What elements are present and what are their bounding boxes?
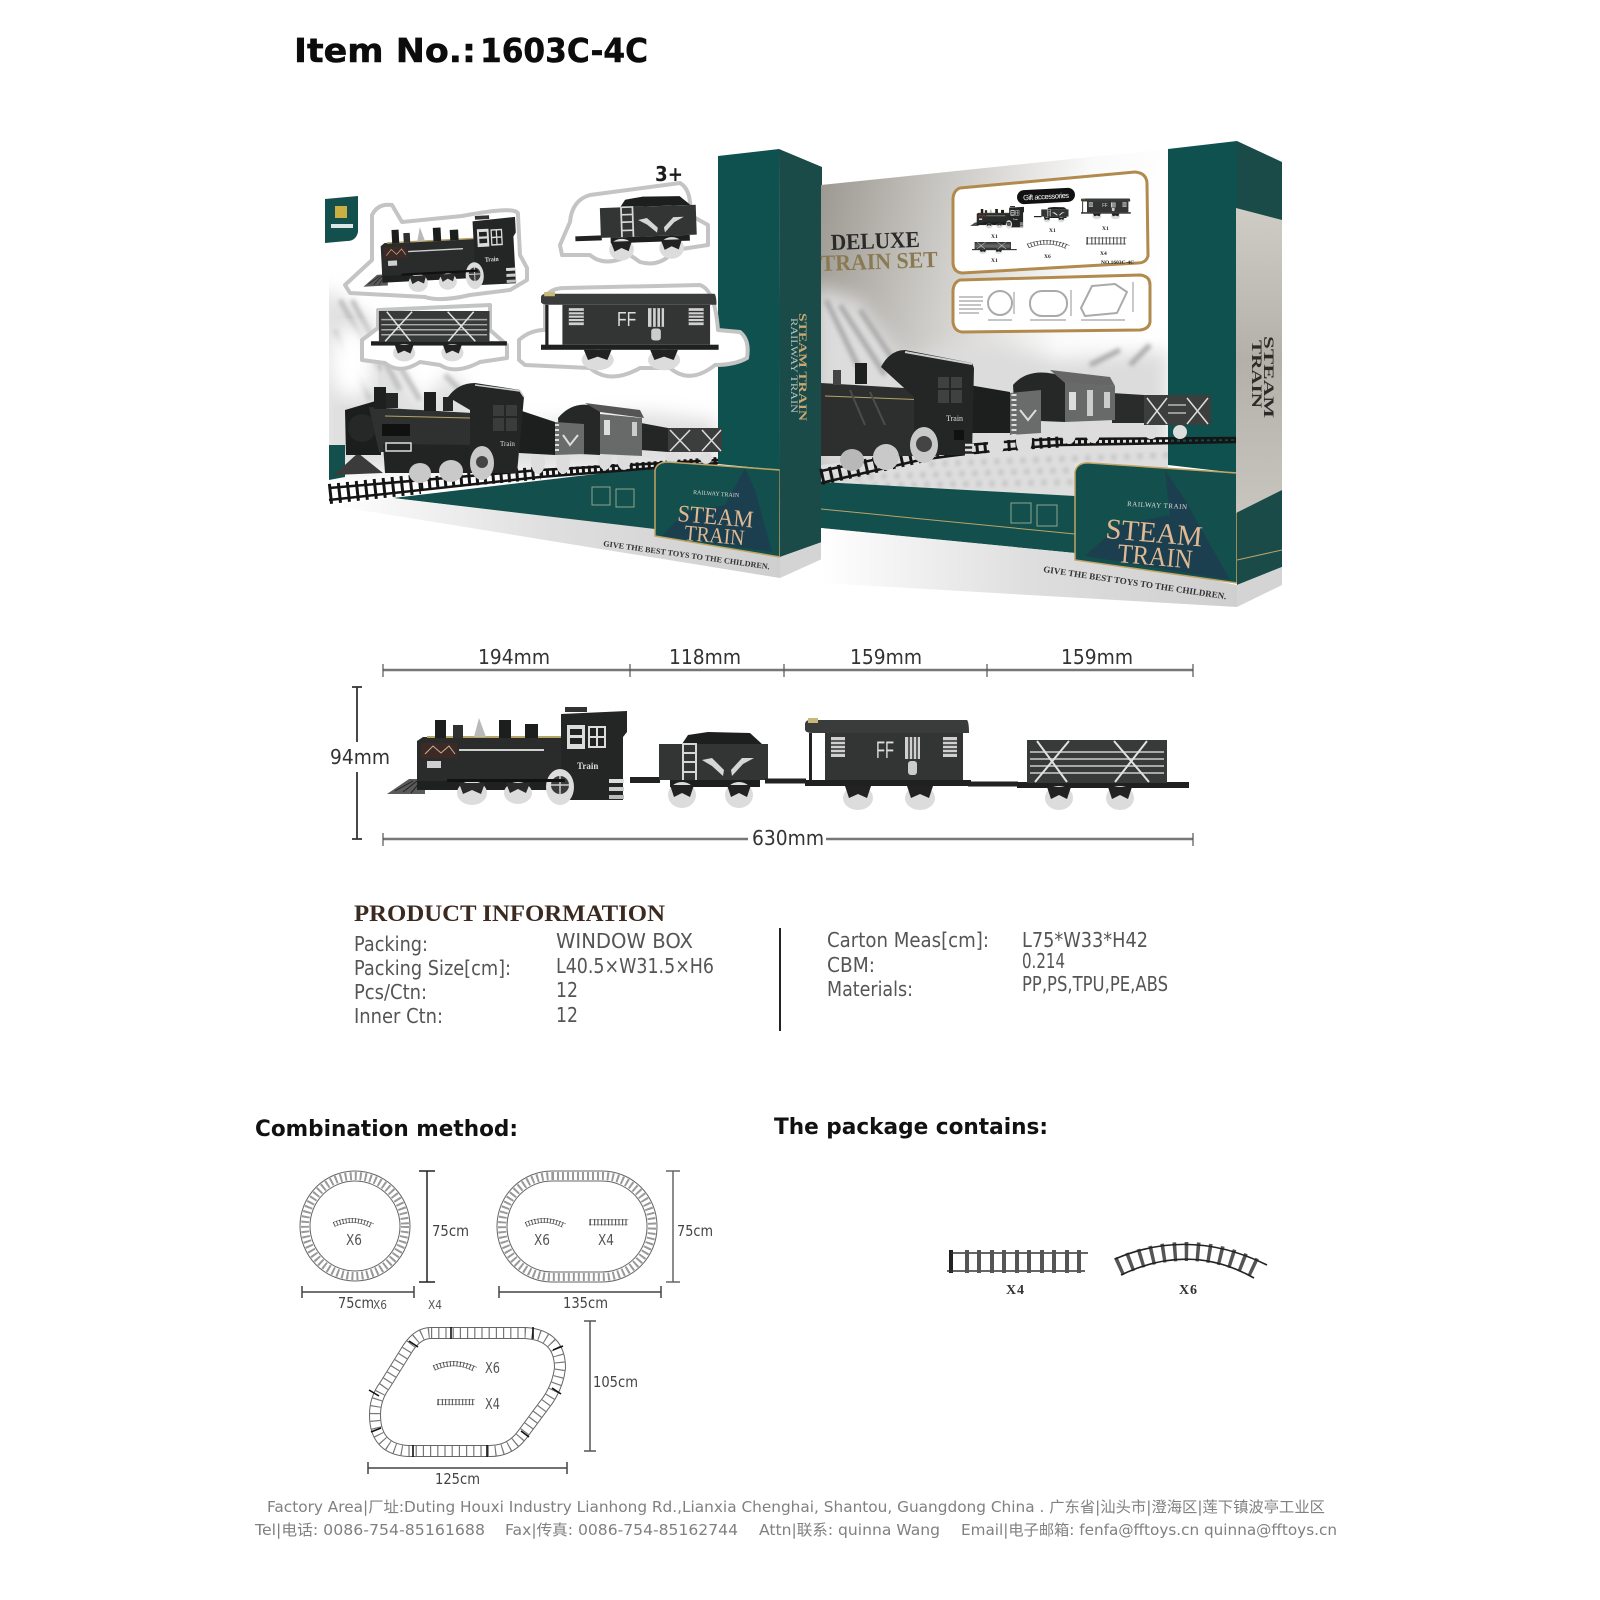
product information left column bbox=[354, 929, 714, 1028]
grey lower band bbox=[821, 528, 1237, 607]
product information right column: L75*W33*H42 bbox=[1022, 928, 1148, 952]
oval track layout: X4 bbox=[598, 1231, 614, 1249]
width labels: 630mm bbox=[752, 826, 824, 850]
locomotive: Train bbox=[500, 440, 515, 448]
hexagonal track layout: 105cm bbox=[593, 1373, 638, 1391]
round track layout: 75cm bbox=[338, 1294, 374, 1312]
pack quantities: X6 bbox=[1044, 254, 1051, 260]
width labels: 159mm bbox=[1061, 645, 1133, 669]
snowy ground bbox=[821, 440, 1168, 497]
round track layout: 75cm bbox=[432, 1222, 469, 1240]
sticker: tender bbox=[560, 183, 708, 264]
tender bbox=[969, 385, 1041, 457]
icons on band bbox=[1011, 503, 1057, 526]
spine title: STEAM TRAIN bbox=[796, 313, 810, 421]
wagon bbox=[641, 423, 722, 464]
pill label bbox=[1017, 187, 1075, 205]
product information left column: Packing Size[cm]: bbox=[354, 956, 511, 980]
divider bbox=[779, 928, 781, 1031]
panel: back of box bbox=[815, 141, 1237, 607]
oval track layout: 135cm bbox=[563, 1294, 608, 1312]
width labels: 94mm bbox=[330, 745, 390, 769]
width labels: 194mm bbox=[478, 645, 550, 669]
product information right column bbox=[827, 928, 1168, 1001]
track bbox=[821, 438, 1236, 483]
grey lower band bbox=[329, 498, 780, 578]
footer contacts: Email|电子邮箱: fenfa@fftoys.cn quinna@fftoys.cn bbox=[961, 1521, 1337, 1539]
photo train bbox=[821, 350, 1211, 471]
dimension lines bbox=[330, 645, 1193, 850]
icons on band bbox=[592, 487, 634, 507]
width labels: 118mm bbox=[669, 645, 741, 669]
hexagonal track layout: X6 bbox=[485, 1359, 500, 1377]
deluxe heading: DELUXE bbox=[830, 227, 920, 255]
title plate bbox=[655, 462, 780, 557]
pack quantities: X1 bbox=[991, 234, 998, 240]
green strip bbox=[1168, 141, 1237, 473]
hexagonal track layout: X4 bbox=[485, 1395, 500, 1413]
green base band bbox=[393, 467, 655, 530]
hexagonal track layout bbox=[368, 1321, 638, 1488]
title: 1603C-4C bbox=[480, 31, 648, 70]
track bbox=[329, 460, 718, 500]
green side strip bbox=[718, 149, 780, 470]
tender bbox=[519, 410, 584, 474]
panel: side of right box bbox=[1236, 141, 1282, 607]
footer contacts bbox=[254, 1521, 1337, 1539]
railway train label: RAILWAY TRAIN bbox=[693, 490, 740, 499]
title plate bbox=[1075, 463, 1237, 583]
railway train label: RAILWAY TRAIN bbox=[1127, 500, 1187, 511]
spine title line two: TRAIN bbox=[1248, 340, 1264, 408]
wagon bbox=[1112, 393, 1211, 439]
gift accessories box bbox=[953, 172, 1148, 273]
pack quantities: X1 bbox=[991, 258, 998, 264]
slogan: GIVE THE BEST TOYS TO THE CHILDREN. bbox=[603, 539, 770, 571]
spine title: STEAM bbox=[1260, 336, 1276, 418]
oval track layout: X6 bbox=[534, 1231, 550, 1249]
round track layout: X6 bbox=[346, 1231, 362, 1249]
title: Item No.: bbox=[294, 31, 476, 70]
train title: TRAIN bbox=[1116, 538, 1194, 575]
locomotive: Train bbox=[946, 414, 963, 423]
product information left column: 12 bbox=[556, 1003, 578, 1027]
locomotive bbox=[821, 350, 974, 471]
pack quantities: X1 bbox=[1049, 228, 1056, 234]
contents heading: The package contains: bbox=[774, 1115, 1048, 1140]
round track layout: X6 bbox=[373, 1298, 387, 1312]
footer contacts: Fax|传真: 0086-754-85162744 bbox=[505, 1521, 738, 1539]
round track layout: X4 bbox=[428, 1298, 442, 1312]
pill label: Gift accessories bbox=[1023, 191, 1069, 202]
product information right column: Materials: bbox=[827, 977, 913, 1001]
sticker: wagon bbox=[362, 305, 507, 369]
logo tab bbox=[325, 196, 358, 243]
pack quantities: NO.1603C-4C bbox=[1101, 260, 1134, 266]
product information left column: Pcs/Ctn: bbox=[354, 980, 427, 1004]
age mark: 3+ bbox=[655, 162, 683, 186]
caboose bbox=[558, 403, 644, 470]
panel: side of left box bbox=[779, 149, 822, 578]
product information right column: CBM: bbox=[827, 953, 875, 977]
pack quantities: X1 bbox=[1102, 226, 1109, 232]
mountains background bbox=[320, 285, 718, 470]
package contents: straight track: X4 bbox=[1006, 1283, 1024, 1298]
product information left column: 12 bbox=[556, 978, 578, 1002]
width labels bbox=[330, 645, 1133, 850]
footer address: Factory Area|厂址:Duting Houxi Industry Lianhong Rd.,Lianxia Chenghai, Shantou, Guangdong China . 广东省|汕头市|澄海区|莲下镇波亭工业区 bbox=[267, 1498, 1325, 1516]
product information left column: L40.5×W31.5×H6 bbox=[556, 954, 714, 978]
combination heading: Combination method: bbox=[255, 1117, 518, 1142]
package contents: straight track bbox=[947, 1250, 1088, 1298]
package contents: curved track: X6 bbox=[1179, 1283, 1197, 1298]
steam train title line two: TRAIN bbox=[684, 520, 746, 550]
locomotive bbox=[334, 383, 524, 483]
product information heading: PRODUCT INFORMATION bbox=[354, 901, 665, 926]
steam train title: STEAM bbox=[676, 501, 754, 534]
layouts box bbox=[953, 275, 1150, 332]
steam title: STEAM bbox=[1104, 513, 1204, 553]
product information right column: PP,PS,TPU,PE,ABS bbox=[1022, 972, 1168, 996]
hexagonal track layout: 125cm bbox=[435, 1470, 480, 1488]
train side view bbox=[387, 707, 1189, 810]
product information left column: Inner Ctn: bbox=[354, 1004, 443, 1028]
product information right column: Carton Meas[cm]: bbox=[827, 928, 989, 952]
product information right column: 0.214 bbox=[1022, 949, 1065, 973]
train set heading: TRAIN SET bbox=[820, 247, 938, 276]
green band bbox=[821, 482, 1075, 553]
slogan: GIVE THE BEST TOYS TO THE CHILDREN. bbox=[1043, 564, 1227, 601]
spine subtitle: RAILWAY TRAIN bbox=[789, 318, 799, 414]
mountains bbox=[815, 285, 1168, 470]
footer contacts: Tel|电话: 0086-754-85161688 bbox=[254, 1521, 485, 1539]
pack quantities: X4 bbox=[1100, 251, 1107, 257]
footer contacts: Attn|联系: quinna Wang bbox=[759, 1521, 940, 1539]
round track layout bbox=[302, 1171, 469, 1312]
caboose bbox=[1013, 370, 1115, 444]
product information left column: Packing: bbox=[354, 932, 428, 956]
photo train bbox=[334, 383, 722, 483]
pack quantities bbox=[991, 226, 1134, 266]
sticker: caboose bbox=[519, 285, 748, 376]
product information left column: WINDOW BOX bbox=[556, 929, 693, 953]
oval track layout bbox=[499, 1171, 713, 1312]
panel: front of box bbox=[320, 149, 780, 578]
oval track layout: 75cm bbox=[677, 1222, 713, 1240]
width labels: 159mm bbox=[850, 645, 922, 669]
package contents: curved track bbox=[1115, 1244, 1267, 1298]
title bbox=[294, 31, 648, 70]
sticker: locomotive bbox=[345, 205, 527, 299]
